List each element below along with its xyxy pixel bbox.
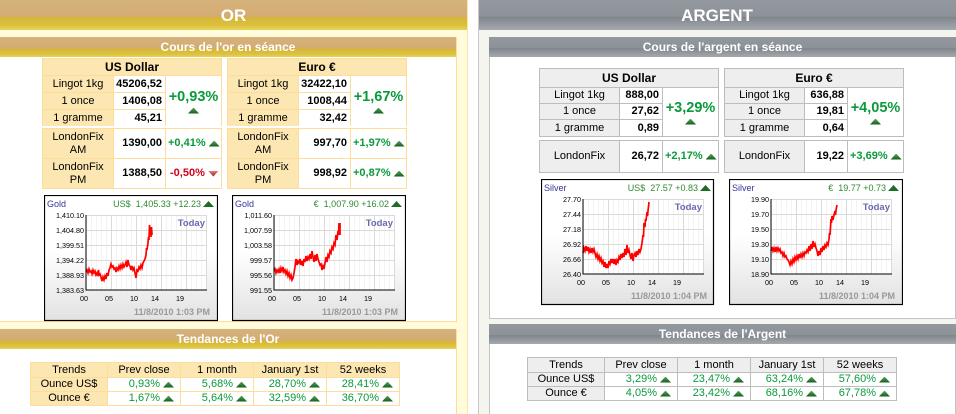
chart: silver in euros: 05 bbox=[790, 278, 798, 287]
chart: silver in euros: Today bbox=[863, 202, 891, 213]
chart: gold in US dollars: 10 bbox=[130, 294, 138, 303]
table: gold Euro: 1 gramme bbox=[238, 112, 288, 124]
panel: silver trends bbox=[489, 324, 956, 414]
table: gold trends: 5,68% bbox=[202, 378, 233, 390]
chart: silver in euros: Silver bbox=[732, 183, 755, 193]
table: gold Euro London Fix bbox=[227, 128, 407, 189]
table: silver US Dollar: 888,00 bbox=[625, 89, 659, 101]
chart: silver in US dollars: Today bbox=[675, 202, 703, 213]
table: gold US Dollar London Fix: +0,41% bbox=[168, 137, 206, 149]
table: gold trends: 32,59% bbox=[269, 392, 306, 404]
chart: silver in US dollars: 00 bbox=[577, 278, 585, 287]
panel: gold live prices bbox=[0, 37, 457, 322]
chart: gold in euros: 05 bbox=[293, 294, 301, 303]
table: silver US Dollar London Fix: LondonFix bbox=[554, 150, 605, 162]
chart: gold in US dollars: 1,404.80 bbox=[56, 226, 84, 235]
table: gold Euro London Fix: +1,97% bbox=[353, 137, 391, 149]
panel: silver live prices bbox=[489, 37, 956, 319]
table: gold Euro: Euro € bbox=[298, 60, 336, 74]
table: silver Euro: Lingot 1kg bbox=[739, 89, 790, 101]
table: silver trends: 4,05% bbox=[626, 387, 657, 399]
chart: silver in euros: 00 bbox=[765, 278, 773, 287]
table: silver trends: Ounce US$ bbox=[538, 373, 594, 385]
table: gold Euro: 1008,44 bbox=[307, 94, 347, 106]
table: silver trends: 68,16% bbox=[766, 387, 803, 399]
chart: gold in euros: 10 bbox=[318, 294, 326, 303]
chart: gold in US dollars: 14 bbox=[151, 294, 159, 303]
table: silver trends: 23,42% bbox=[693, 387, 730, 399]
table: silver US Dollar bbox=[539, 68, 719, 137]
table: gold trends: 5,64% bbox=[202, 392, 233, 404]
chart: silver in euros: 14 bbox=[836, 278, 844, 287]
heading: OR: OR bbox=[221, 6, 246, 25]
chart: gold in euros: 1,003.58 bbox=[244, 241, 272, 250]
chart: gold in euros: 14 bbox=[339, 294, 347, 303]
chart: gold in euros: Today bbox=[366, 218, 394, 229]
table: gold US Dollar: 1 gramme bbox=[53, 112, 103, 124]
heading: silver trends: Tendances de l'Argent bbox=[659, 327, 786, 341]
table: silver US Dollar: US Dollar bbox=[602, 70, 656, 84]
chart: gold in US dollars: Today bbox=[178, 218, 206, 229]
chart: gold in euros: 991.55 bbox=[250, 286, 272, 295]
chart: silver in US dollars: 27.44 bbox=[563, 210, 581, 219]
heading: silver live prices: Cours de l'argent en séance bbox=[643, 40, 802, 54]
chart: gold in US dollars: US$ 1,405.33 +12.23 bbox=[113, 199, 201, 209]
chart: gold in US dollars: 1,383.63 bbox=[56, 286, 84, 295]
table: gold US Dollar: US Dollar bbox=[105, 60, 159, 74]
table: silver US Dollar: 1 gramme bbox=[555, 122, 604, 134]
table: gold Euro: +1,67% bbox=[354, 88, 403, 104]
chart: silver in euros: 19.70 bbox=[751, 210, 769, 219]
chart: gold in euros: 995.56 bbox=[250, 271, 272, 280]
table: gold Euro London Fix: LondonFix bbox=[237, 160, 289, 172]
chart: silver in US dollars: 27.70 bbox=[563, 195, 581, 204]
table: gold trends: 1 month bbox=[197, 364, 237, 376]
table: silver US Dollar: 1 once bbox=[563, 105, 596, 117]
chart: silver in US dollars: 26.40 bbox=[563, 270, 581, 279]
heading: silver trends bbox=[489, 324, 956, 344]
chart: silver in US dollars bbox=[541, 179, 714, 306]
table: gold Euro: 32,42 bbox=[319, 112, 347, 124]
chart: silver in euros: 19.50 bbox=[751, 225, 769, 234]
table: gold Euro: 32422,10 bbox=[301, 78, 347, 90]
chart: silver in US dollars: Silver bbox=[544, 183, 567, 193]
table: silver US Dollar: 27,62 bbox=[631, 105, 659, 117]
table: silver Euro London Fix: +3,69% bbox=[850, 150, 888, 162]
table: silver trends: Trends bbox=[549, 358, 583, 370]
heading: OR bbox=[0, 0, 467, 30]
table: gold Euro: Lingot 1kg bbox=[238, 78, 288, 90]
table: silver Euro: 636,88 bbox=[810, 89, 844, 101]
table: gold US Dollar London Fix: LondonFix bbox=[52, 130, 104, 142]
panel: gold trends bbox=[0, 329, 457, 414]
chart: gold in euros: 999.57 bbox=[250, 256, 272, 265]
table: silver Euro bbox=[724, 68, 904, 137]
chart: gold in US dollars: 11/8/2010 1:03 PM bbox=[134, 307, 210, 317]
chart: silver in euros: € 19.77 +0.73 bbox=[828, 183, 886, 193]
chart: silver in US dollars: 10 bbox=[627, 278, 635, 287]
table: silver Euro London Fix: 19,22 bbox=[816, 150, 844, 162]
heading: silver live prices bbox=[489, 37, 956, 57]
chart: gold in US dollars: 05 bbox=[105, 294, 113, 303]
table: silver trends: 57,60% bbox=[839, 373, 876, 385]
table: silver trends: Prev close bbox=[615, 358, 667, 370]
table: silver trends: 52 weeks bbox=[837, 358, 883, 370]
table: gold Euro London Fix: AM bbox=[255, 144, 271, 156]
table: gold Euro London Fix: 998,92 bbox=[313, 167, 347, 179]
table: silver Euro: Euro € bbox=[795, 70, 833, 84]
chart: silver in euros: 10 bbox=[815, 278, 823, 287]
table: gold trends: 1,67% bbox=[129, 392, 160, 404]
chart: silver in US dollars: 27.18 bbox=[563, 225, 581, 234]
table: gold US Dollar London Fix: LondonFix bbox=[52, 160, 104, 172]
chart: silver in euros: 11/8/2010 1:04 PM bbox=[819, 291, 895, 301]
table: gold US Dollar London Fix bbox=[42, 128, 222, 189]
table: gold US Dollar: +0,93% bbox=[169, 88, 218, 104]
chart: gold in US dollars: 1,399.51 bbox=[56, 241, 84, 250]
table: gold trends: January 1st bbox=[262, 364, 318, 376]
chart: gold in euros: 1,007.59 bbox=[244, 226, 272, 235]
table: silver trends: 1 month bbox=[694, 358, 734, 370]
table: silver Euro London Fix bbox=[724, 140, 904, 173]
chart: silver in US dollars: US$ 27.57 +0.83 bbox=[628, 183, 698, 193]
table: silver Euro: 1 once bbox=[748, 105, 781, 117]
table: gold trends: Ounce € bbox=[48, 392, 90, 404]
table: gold Euro bbox=[227, 58, 407, 126]
chart: gold in US dollars: 1,394.22 bbox=[56, 256, 84, 265]
table: silver Euro: +4,05% bbox=[851, 100, 900, 116]
table: gold trends bbox=[30, 362, 400, 406]
table: silver trends: 23,47% bbox=[693, 373, 730, 385]
table: gold US Dollar: 45,21 bbox=[134, 112, 162, 124]
table: silver US Dollar: 0,89 bbox=[638, 122, 659, 134]
chart: gold in US dollars: Gold bbox=[47, 199, 66, 209]
table: gold US Dollar: 1406,08 bbox=[122, 94, 162, 106]
chart: gold in euros: 00 bbox=[268, 294, 276, 303]
table: gold trends: Prev close bbox=[118, 364, 170, 376]
table: gold US Dollar: 45206,52 bbox=[116, 78, 162, 90]
table: silver trends: 63,24% bbox=[766, 373, 803, 385]
chart: silver in euros bbox=[729, 179, 903, 306]
table: gold US Dollar London Fix: 1388,50 bbox=[122, 167, 162, 179]
heading: ARGENT bbox=[478, 0, 956, 30]
chart: silver in euros: 19.30 bbox=[751, 240, 769, 249]
table: gold Euro London Fix: +0,87% bbox=[353, 167, 391, 179]
chart: silver in US dollars: 05 bbox=[602, 278, 610, 287]
chart: gold in US dollars bbox=[44, 195, 218, 322]
chart: gold in euros: 1,011.60 bbox=[245, 211, 272, 220]
chart: silver in US dollars: 26.92 bbox=[563, 240, 581, 249]
table: silver trends: January 1st bbox=[759, 358, 815, 370]
table: silver US Dollar London Fix bbox=[539, 140, 719, 173]
panel: gold column bbox=[0, 0, 468, 414]
table: gold trends: Trends bbox=[52, 364, 86, 376]
heading: gold trends: Tendances de l'Or bbox=[177, 332, 279, 346]
table: silver trends: 67,78% bbox=[839, 387, 876, 399]
table: silver Euro: 19,81 bbox=[816, 105, 844, 117]
table: gold Euro: 1 once bbox=[246, 94, 280, 106]
table: gold US Dollar: Lingot 1kg bbox=[53, 78, 103, 90]
table: gold US Dollar bbox=[42, 58, 222, 126]
table: silver Euro London Fix: LondonFix bbox=[739, 150, 790, 162]
table: silver Euro: 0,64 bbox=[823, 122, 844, 134]
chart: gold in US dollars: 19 bbox=[176, 294, 184, 303]
chart: silver in euros: 19.90 bbox=[751, 195, 769, 204]
chart: gold in euros: 19 bbox=[364, 294, 372, 303]
chart: silver in euros: 18.90 bbox=[751, 270, 769, 279]
chart: gold in euros: Gold bbox=[235, 199, 254, 209]
table: silver trends: 3,29% bbox=[626, 373, 657, 385]
table: silver trends bbox=[527, 357, 897, 401]
table: gold trends: 36,70% bbox=[342, 392, 379, 404]
heading: gold live prices bbox=[0, 37, 456, 57]
table: gold Euro London Fix: LondonFix bbox=[237, 130, 289, 142]
table: silver US Dollar: Lingot 1kg bbox=[554, 89, 605, 101]
chart: gold in euros: 11/8/2010 1:03 PM bbox=[322, 307, 398, 317]
table: silver US Dollar London Fix: 26,72 bbox=[631, 150, 659, 162]
table: gold trends: 28,70% bbox=[269, 378, 306, 390]
table: gold Euro London Fix: PM bbox=[255, 174, 271, 186]
table: gold US Dollar London Fix: PM bbox=[70, 174, 86, 186]
table: gold trends: Ounce US$ bbox=[41, 378, 97, 390]
table: silver US Dollar London Fix: +2,17% bbox=[665, 150, 703, 162]
table: gold trends: 0,93% bbox=[129, 378, 160, 390]
chart: gold in US dollars: 1,410.10 bbox=[56, 211, 84, 220]
table: gold Euro London Fix: 997,70 bbox=[313, 137, 347, 149]
table: gold US Dollar London Fix: 1390,00 bbox=[122, 137, 162, 149]
heading: gold live prices: Cours de l'or en séance bbox=[161, 40, 295, 54]
chart: silver in euros: 19 bbox=[861, 278, 869, 287]
chart: silver in US dollars: 11/8/2010 1:04 PM bbox=[631, 291, 707, 301]
table: gold trends: 52 weeks bbox=[340, 364, 386, 376]
heading: ARGENT: ARGENT bbox=[681, 6, 753, 25]
chart: gold in US dollars: 1,388.93 bbox=[56, 271, 84, 280]
table: gold trends: 28,41% bbox=[342, 378, 379, 390]
chart: gold in euros: € 1,007.90 +16.02 bbox=[314, 199, 389, 209]
chart: silver in US dollars: 14 bbox=[648, 278, 656, 287]
chart: silver in US dollars: 26.66 bbox=[563, 255, 581, 264]
chart: silver in US dollars: 19 bbox=[673, 278, 681, 287]
table: gold US Dollar London Fix: -0,50% bbox=[170, 167, 205, 179]
table: gold US Dollar: 1 once bbox=[61, 94, 95, 106]
chart: gold in euros bbox=[232, 195, 406, 322]
table: gold US Dollar London Fix: AM bbox=[70, 144, 86, 156]
chart: gold in US dollars: 00 bbox=[80, 294, 88, 303]
heading: gold trends bbox=[0, 329, 456, 349]
panel: silver column bbox=[478, 0, 956, 414]
chart: silver in euros: 19.10 bbox=[751, 255, 769, 264]
table: silver US Dollar: +3,29% bbox=[666, 100, 715, 116]
table: silver Euro: 1 gramme bbox=[740, 122, 789, 134]
table: silver trends: Ounce € bbox=[545, 387, 587, 399]
